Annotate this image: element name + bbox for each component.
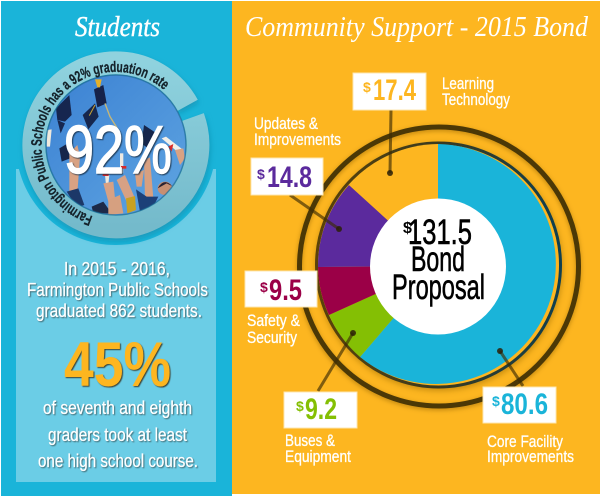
center label: Proposal bbox=[392, 268, 485, 307]
text block: high school course: graders took at least bbox=[48, 424, 187, 445]
text block: graduated students: graduated 862 students. bbox=[36, 300, 202, 321]
callout: learning technology: 17.4 bbox=[373, 74, 416, 107]
arms and people bbox=[69, 145, 80, 193]
photo: graduates throwing caps bbox=[46, 75, 186, 215]
text block: high school course: one high school course. bbox=[38, 450, 198, 471]
segment: learning technology bbox=[349, 144, 438, 266]
leader dots bbox=[336, 170, 503, 354]
panel: community support background bbox=[232, 1, 600, 494]
center label: 131.5 bbox=[408, 213, 472, 252]
segment: safety and security bbox=[318, 266, 438, 315]
callout: safety and security: $ bbox=[260, 279, 268, 295]
callout: learning technology: Technology bbox=[442, 90, 510, 109]
callout: buses and equipment: $ bbox=[296, 398, 304, 414]
callout: safety and security: Safety & bbox=[247, 311, 301, 330]
callout: updates and improvements: 14.8 bbox=[267, 161, 312, 194]
callout: core facility improvements bbox=[483, 387, 574, 466]
donut chart: bond proposal bbox=[315, 143, 563, 391]
callout: buses and equipment: Equipment bbox=[285, 447, 351, 466]
callout: learning technology bbox=[353, 73, 510, 110]
text block: graduated students bbox=[27, 258, 208, 321]
big number 92%: 92% bbox=[64, 112, 172, 188]
callout: safety and security: Security bbox=[247, 328, 297, 347]
text block: graduated students: In 2015 - 2016, bbox=[64, 258, 170, 279]
ring shadow bbox=[35, 66, 199, 230]
callout: learning technology: Learning bbox=[442, 74, 494, 93]
badge: 92% graduation rate bbox=[22, 51, 212, 243]
callout: core facility improvements: Core Facility bbox=[487, 432, 563, 451]
callout: safety and security: 9.5 bbox=[269, 274, 302, 307]
segment: updates and improvements bbox=[318, 185, 438, 267]
panel: students light card bbox=[16, 169, 216, 482]
segment: buses and equipment bbox=[329, 266, 438, 357]
pie shadow bbox=[315, 143, 563, 391]
big number 45%: 45% bbox=[64, 330, 171, 400]
segment: core facility improvements bbox=[360, 144, 556, 384]
callout: learning technology: $ bbox=[363, 79, 371, 95]
curved caption: Farmington Public Schools has a 92% graduation rate bbox=[31, 60, 168, 226]
text block: graduated students: Farmington Public Schools bbox=[27, 279, 208, 300]
callout: updates and improvements: Improvements bbox=[254, 130, 341, 149]
callout: core facility improvements: 80.6 bbox=[501, 388, 548, 421]
center label: Bond bbox=[411, 240, 465, 279]
callout: buses and equipment: Buses & bbox=[285, 431, 336, 450]
outer ring bbox=[300, 127, 578, 408]
callout: updates and improvements bbox=[251, 114, 341, 195]
callout: updates and improvements: Updates & bbox=[254, 114, 319, 133]
callout: updates and improvements: $ bbox=[257, 166, 265, 182]
photo rim bbox=[46, 75, 186, 215]
heading: Students: Students bbox=[75, 11, 160, 43]
callout: buses and equipment bbox=[284, 392, 357, 466]
text block: high school course bbox=[38, 397, 198, 471]
center label: $ bbox=[403, 220, 412, 237]
ring bbox=[34, 63, 198, 227]
panel: students background bbox=[1, 1, 232, 496]
callout: safety and security bbox=[245, 271, 317, 347]
leader lines bbox=[290, 110, 523, 391]
text block: high school course: of seventh and eighth bbox=[43, 397, 192, 418]
callout: core facility improvements: Improvements bbox=[487, 447, 574, 466]
caps bbox=[56, 95, 72, 122]
center label bbox=[392, 213, 485, 307]
callout: core facility improvements: $ bbox=[492, 393, 500, 409]
diplomas bbox=[162, 136, 182, 150]
ring backing circle bbox=[16, 45, 216, 245]
pie outline bbox=[316, 143, 560, 387]
callout: buses and equipment: 9.2 bbox=[305, 393, 337, 426]
center hole bbox=[370, 198, 506, 334]
